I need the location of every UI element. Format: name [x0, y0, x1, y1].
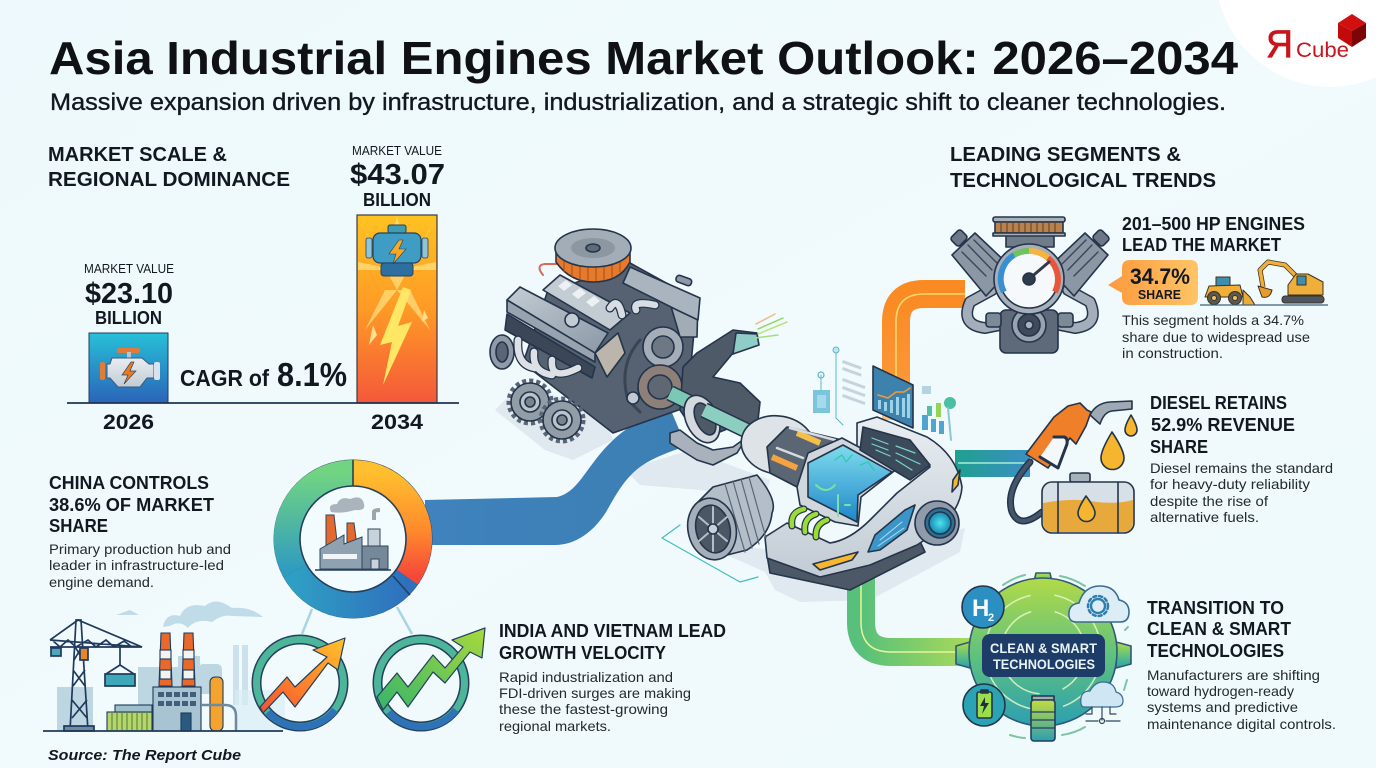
icon: cloud network	[1081, 682, 1123, 724]
text: China market share: SHARE	[49, 515, 108, 536]
text: source: Source: The Report Cube	[48, 747, 241, 764]
heading: market scale	[48, 143, 290, 191]
year 2034: 2034	[371, 411, 423, 434]
callout: 34.7% share: 34.7%	[1130, 264, 1190, 289]
icon: air filter	[555, 229, 631, 282]
shadows under engine and motor	[495, 385, 965, 602]
icon: gears	[509, 381, 583, 441]
icon: growth arrow Vietnam	[377, 628, 485, 727]
icon: hydrogen	[962, 586, 1004, 628]
text: India and Vietnam: these the fastest-growing	[499, 701, 668, 717]
icon: growth arrow India	[256, 638, 345, 727]
text: clean and smart: TECHNOLOGIES	[1147, 640, 1284, 661]
icon: clean and smart gear	[956, 573, 1131, 741]
text: clean and smart: maintenance digital controls.	[1147, 716, 1336, 732]
text: India and Vietnam: Rapid industrialization and	[499, 669, 673, 685]
icon: cloud gear	[1069, 586, 1129, 622]
text: diesel: despite the rise of	[1150, 493, 1268, 509]
value label 2026	[84, 262, 174, 328]
illustration: electric smart motor	[662, 347, 962, 590]
text: China market share: engine demand.	[49, 574, 154, 590]
text: diesel: for heavy-duty reliability	[1150, 476, 1310, 492]
text: China market share: leader in infrastructure-led	[49, 557, 224, 573]
text: diesel: Diesel remains the standard	[1150, 460, 1333, 476]
right wheel	[915, 501, 959, 545]
subtitle: Massive expansion driven by infrastructure, industrialization, and a strategic shift to cleaner technologies.	[50, 89, 1226, 116]
icon: V-engine with gauge	[950, 217, 1110, 353]
text: India and Vietnam: regional markets.	[499, 718, 611, 734]
text: 201-500 HP description: share due to widespread use	[1122, 329, 1310, 345]
text: 201-500 HP heading: 201–500 HP ENGINES	[1122, 213, 1305, 234]
icon: excavator	[1200, 262, 1328, 305]
icon: chimneys and plant	[107, 633, 236, 731]
icon: battery badge	[963, 684, 1005, 726]
text: clean and smart: CLEAN & SMART	[1147, 618, 1292, 639]
floating data panels	[813, 347, 956, 440]
connector: green pipe	[861, 575, 970, 652]
chart: donut with factory	[274, 460, 432, 618]
icon: battery	[1031, 696, 1055, 741]
icon: crane	[50, 620, 142, 731]
rear ring and stator	[737, 410, 819, 480]
text: clean and smart: systems and predictive	[1147, 699, 1298, 715]
circuit line	[662, 525, 758, 582]
coils	[792, 509, 827, 537]
year 2026: 2026	[103, 411, 154, 434]
motor drum	[694, 475, 773, 558]
text: diesel	[1150, 392, 1333, 525]
value label 2034: $43.07	[350, 159, 445, 191]
connector lines from donut to growth icons	[302, 607, 412, 634]
text: diesel: SHARE	[1150, 436, 1208, 457]
text: diesel: DIESEL RETAINS	[1150, 392, 1287, 413]
text: China market share: Primary production hub and	[49, 541, 231, 557]
text: clean and smart: Manufacturers are shifting	[1147, 667, 1320, 683]
value label 2026: BILLION	[95, 308, 162, 328]
value label 2034	[350, 144, 445, 210]
icon: hydrogen: 2	[988, 612, 994, 624]
icon: flywheel housing	[680, 330, 760, 440]
icon: hydrogen: H	[972, 595, 989, 622]
text: 201-500 HP description	[1122, 312, 1310, 361]
lower base	[767, 535, 925, 590]
bar 2026 with engine icon	[89, 333, 168, 403]
icon: fuel nozzle and tank	[1010, 401, 1137, 533]
CAGR label: 8.1%	[277, 356, 347, 393]
text: clean and smart	[1147, 597, 1336, 732]
illustration: industrial skyline with crane	[43, 601, 285, 731]
heading: market scale: MARKET SCALE &	[48, 143, 227, 166]
holographic chart	[873, 366, 913, 428]
text: India and Vietnam: GROWTH VELOCITY	[499, 642, 667, 663]
text: clean and smart: toward hydrogen-ready	[1147, 683, 1294, 699]
value label 2026: $23.10	[85, 278, 173, 310]
text: India and Vietnam: INDIA AND VIETNAM LEAD	[499, 620, 726, 641]
text: 201-500 HP heading: LEAD THE MARKET	[1122, 234, 1282, 255]
bar 2034 with engine and lightning	[357, 215, 437, 403]
logo: Report Cube: Cube	[1296, 39, 1349, 62]
text: China market share: 38.6% OF MARKET	[49, 494, 215, 515]
callout: 34.7% share	[1108, 260, 1198, 305]
text: 201-500 HP description: in construction.	[1122, 345, 1223, 361]
title: Asia Industrial Engines Market Outlook: 2026–2034	[49, 32, 1238, 84]
text: India and Vietnam: FDI-driven surges are making	[499, 685, 691, 701]
text: 201-500 HP description: This segment holds a 34.7%	[1122, 312, 1304, 328]
screen frame and screen	[797, 438, 898, 526]
text: diesel: alternative fuels.	[1150, 509, 1259, 525]
callout: 34.7% share: SHARE	[1138, 287, 1181, 302]
connector: teal pipe	[955, 450, 1030, 477]
text: India and Vietnam	[499, 620, 726, 734]
heading: market scale: REGIONAL DOMINANCE	[48, 168, 290, 191]
chassis	[765, 417, 962, 577]
heading: leading segments: LEADING SEGMENTS &	[950, 143, 1181, 166]
heading: leading segments: TECHNOLOGICAL TRENDS	[950, 169, 1216, 192]
value label 2034: MARKET VALUE	[352, 144, 442, 158]
value label 2034: BILLION	[363, 190, 431, 210]
icon: factory	[315, 497, 391, 570]
heading: leading segments	[950, 143, 1216, 192]
text: diesel: 52.9% REVENUE	[1151, 414, 1295, 435]
CAGR label: CAGR of	[180, 365, 269, 391]
value label 2026: MARKET VALUE	[84, 262, 174, 276]
label pill: CLEAN & SMART	[990, 640, 1097, 656]
label pill: TECHNOLOGIES	[993, 656, 1095, 672]
logo: Report Cube: Я	[1266, 23, 1293, 66]
text: clean and smart: TRANSITION TO	[1147, 597, 1284, 618]
icon: wheel loader	[1205, 277, 1255, 305]
text: 201-500 HP heading	[1122, 213, 1305, 255]
logo: Report Cube	[1215, 0, 1376, 87]
icon: drops	[1125, 415, 1137, 436]
illustration: conventional engine	[490, 229, 787, 465]
text: China market share	[49, 472, 231, 590]
label pill	[982, 634, 1105, 677]
connector: orange pipe	[896, 294, 965, 420]
connector: blue ribbon from donut to engine	[425, 408, 686, 545]
CAGR label	[180, 356, 347, 393]
text: China market share: CHINA CONTROLS	[49, 472, 209, 493]
panel: market scale	[48, 143, 459, 434]
